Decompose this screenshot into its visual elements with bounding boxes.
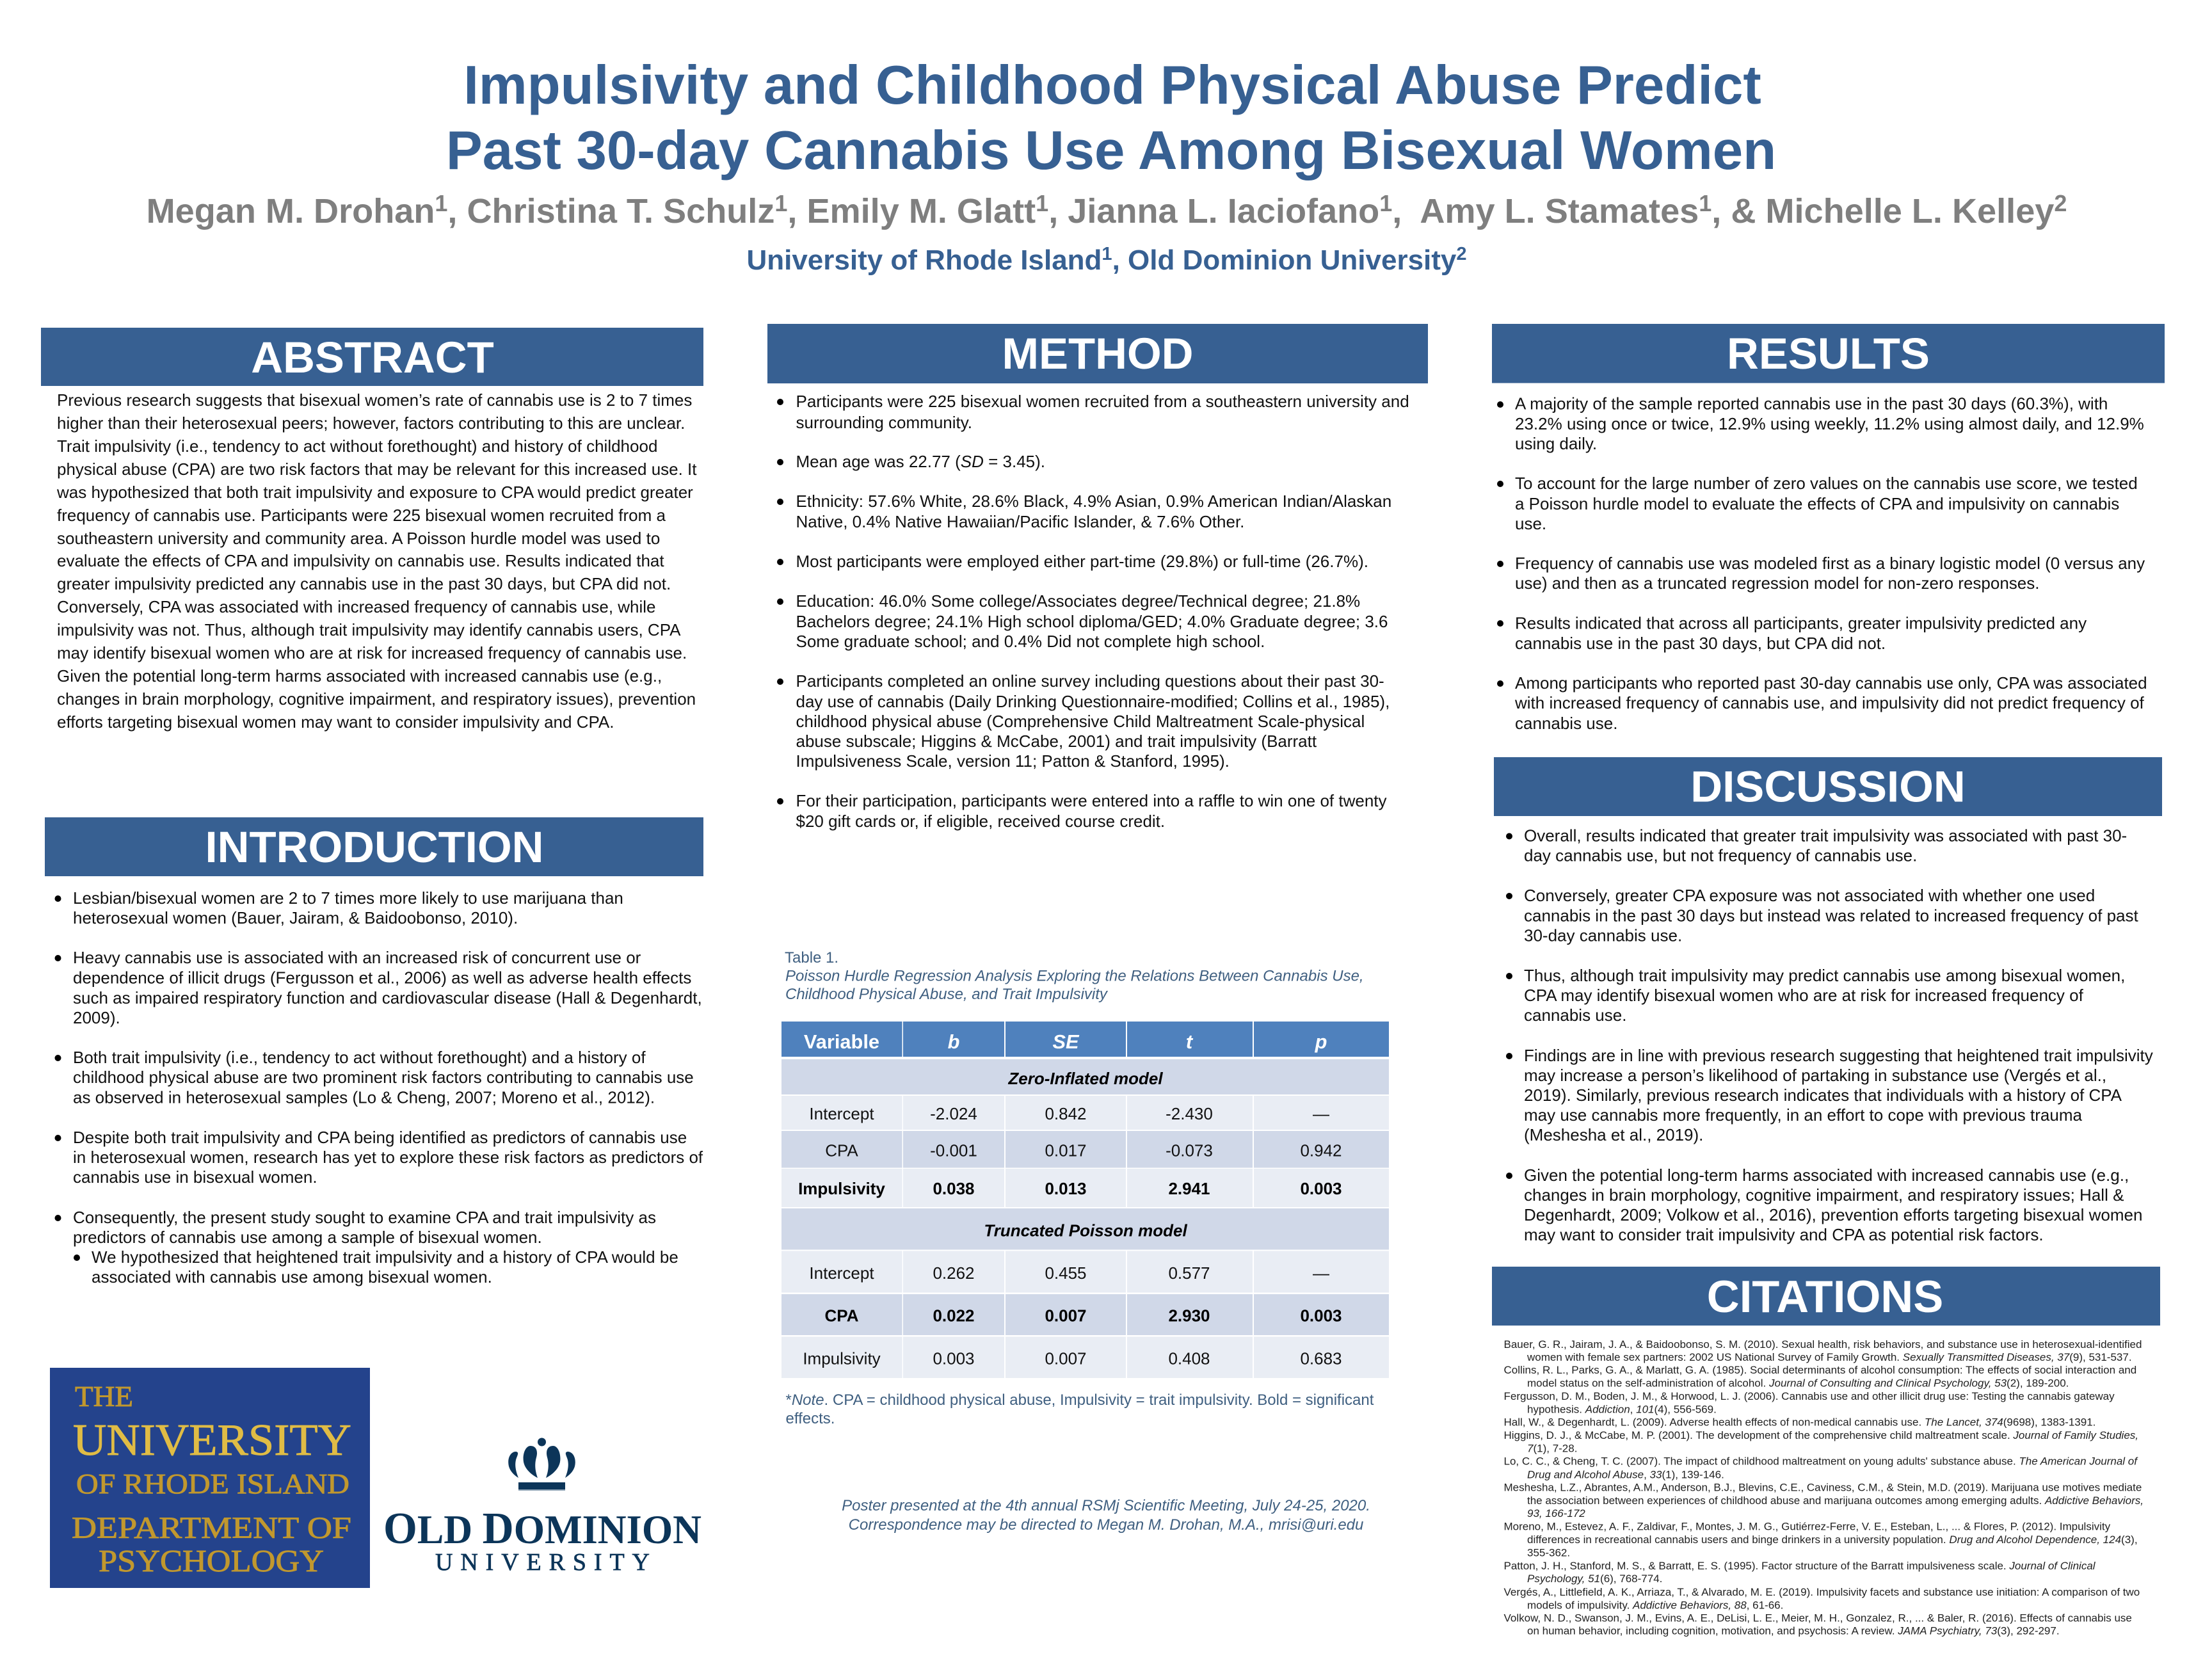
introduction bullets: Both trait impulsivity (i.e., tendency to act without forethought) and a history of — [73, 1048, 646, 1067]
table note — [786, 1391, 1374, 1427]
heading: introduction: INTRODUCTION — [205, 822, 543, 872]
row: CPA 1: -0.073 — [1166, 1141, 1213, 1160]
icon: crown — [508, 1438, 575, 1491]
row: CPA 2: 0.007 — [1045, 1306, 1087, 1325]
logo: University of Rhode Island Department of Psychology: THE — [75, 1381, 133, 1413]
reference list: 93, 166-172 — [1527, 1507, 1585, 1519]
results bullets — [1497, 394, 2147, 733]
discussion bullets: cannabis use. — [1524, 1006, 1626, 1025]
results bullets: To account for the large number of zero values on the cannabis use score, we tested — [1515, 474, 2138, 493]
introduction bullets: Consequently, the present study sought to examine CPA and trait impulsivity as — [73, 1208, 656, 1227]
abstract text: greater impulsivity predicted any cannabis use in the past 30 days, but CPA did not. — [57, 574, 671, 593]
reference list: 355-362. — [1527, 1546, 1570, 1559]
reference list — [1504, 1338, 2144, 1637]
row: CPA 2: 0.003 — [1300, 1306, 1342, 1325]
abstract text: Trait impulsivity (i.e., tendency to act without forethought) and history of childhood — [57, 437, 657, 456]
authors: 1 — [1379, 190, 1392, 216]
introduction bullets: We hypothesized that heightened trait impulsivity and a history of CPA would be — [92, 1247, 678, 1267]
discussion bullets: Findings are in line with previous research suggesting that heightened trait impulsivity — [1524, 1046, 2153, 1065]
results bullets: Frequency of cannabis use was modeled first as a binary logistic model (0 versus any — [1515, 554, 2145, 573]
authors: 1 — [435, 190, 447, 216]
reference list: women with female sex partners: 2002 US National Survey of Family Growth. Sexually Transmitted Diseases, 37(9), 531-537. — [1527, 1351, 2132, 1363]
row: CPA 2 — [781, 1294, 1389, 1335]
discussion bullets: Conversely, greater CPA exposure was not associated with whether one used — [1524, 886, 2095, 905]
reference list: 7(1), 7-28. — [1527, 1443, 1577, 1454]
row: intercept 1 — [781, 1096, 1389, 1130]
authors: Megan M. Drohan — [147, 192, 435, 230]
table note: effects. — [786, 1410, 835, 1427]
logo: University of Rhode Island Department of Psychology: UNIVERSITY — [73, 1416, 351, 1465]
row: impulsivity 2: 0.007 — [1045, 1349, 1087, 1368]
row: impulsivity 1: 2.941 — [1168, 1179, 1210, 1198]
reference list: Drug and Alcohol Abuse, 33(1), 139-146. — [1527, 1468, 1724, 1481]
discussion bullets: day cannabis use, but not frequency of cannabis use. — [1524, 846, 1917, 865]
reference list: Psychology, 51(6), 768-774. — [1527, 1573, 1662, 1585]
row: CPA 1: CPA — [825, 1141, 858, 1160]
authors: 1 — [774, 190, 787, 216]
introduction bullets: as observed in heterosexual samples (Lo & Cheng, 2007; Moreno et al., 2012). — [73, 1088, 655, 1107]
abstract text: changes in brain morphology, cognitive impairment, and respiratory issues), prevention — [57, 689, 696, 709]
abstract text: physical abuse (CPA) are two risk factors that may be relevant for this increased use. It — [57, 460, 697, 479]
table caption: Poisson Hurdle Regression Analysis Exploring the Relations Between Cannabis Use, — [785, 968, 1364, 984]
introduction bullets — [55, 888, 703, 1286]
table header row — [781, 1022, 1389, 1057]
table header row: Variable — [804, 1030, 879, 1053]
row: impulsivity 1: 0.013 — [1045, 1179, 1087, 1198]
row: intercept 1: 0.842 — [1045, 1104, 1087, 1123]
discussion bullets: Overall, results indicated that greater trait impulsivity was associated with past 30- — [1524, 826, 2127, 845]
abstract text: evaluate the effects of CPA and impulsivity on cannabis use. Results indicated that — [57, 551, 664, 570]
authors: 1 — [1036, 190, 1048, 216]
reference list: Moreno, M., Estevez, A. F., Zaldivar, F., Montes, J. M. G., Gutiérrez-Ferre, V. E., Esteban, L., ... & Flores, P. (2012). Impulsivity — [1504, 1521, 2111, 1532]
panel: discussion — [1494, 757, 2162, 1244]
discussion bullets: CPA may identify bisexual women who are at risk for increased frequency of — [1524, 986, 2084, 1005]
method bullets: childhood physical abuse (Comprehensive Child Maltreatment Scale-physical — [796, 712, 1365, 731]
abstract text: Conversely, CPA was associated with increased frequency of cannabis use, while — [57, 597, 656, 616]
row: impulsivity 1: Impulsivity — [798, 1179, 885, 1198]
row: intercept 2 — [781, 1251, 1389, 1293]
table note: *Note. CPA = childhood physical abuse, Impulsivity = trait impulsivity. Bold = significant — [786, 1391, 1374, 1409]
introduction bullets: associated with cannabis use among bisexual women. — [92, 1267, 492, 1286]
reference list: Patton, J. H., Stanford, M. S., & Barratt, E. S. (1995). Factor structure of the Barratt impulsiveness scale. Journal of Clinical — [1504, 1560, 2096, 1572]
method bullets: Participants completed an online survey including questions about their past 30- — [796, 671, 1384, 691]
heading: citations — [1492, 1267, 2160, 1326]
panel: abstract — [41, 328, 703, 732]
reference list: differences in recreational cannabis users and binge drinkers in a university population. Drug and Alcohol Dependence, 124(3), — [1527, 1534, 2138, 1546]
results bullets: cannabis use in the past 30 days, but CPA did not. — [1515, 634, 1886, 653]
results bullets: Among participants who reported past 30-day cannabis use only, CPA was associated — [1515, 673, 2147, 693]
reference list: Volkow, N. D., Swanson, J. M., Evins, A. E., DeLisi, L. E., Meier, M. H., Gonzalez, R., ... & Baler, R. (2016). Effects of cannabis use — [1504, 1612, 2132, 1624]
results bullets: Results indicated that across all participants, greater impulsivity predicted any — [1515, 613, 2087, 632]
abstract text: impulsivity was not. Thus, although trait impulsivity may identify cannabis users, CPA — [57, 620, 681, 639]
row: intercept 2: 0.262 — [933, 1263, 975, 1283]
row: CPA 1: 0.942 — [1300, 1141, 1342, 1160]
row: zero-inflated model: Zero-Inflated model — [1007, 1069, 1163, 1088]
reference list: Hall, W., & Degenhardt, L. (2009). Adverse health effects of non-medical cannabis use. The Lancet, 374(9698), 1383-1391. — [1504, 1416, 2096, 1429]
method bullets: Impulsiveness Scale, version 11; Patton & Stanford, 1995). — [796, 751, 1230, 771]
discussion bullets: (Meshesha et al., 2019). — [1524, 1125, 1703, 1144]
abstract text: may identify bisexual women who are at risk for increased frequency of cannabis use. — [57, 643, 687, 662]
method bullets: For their participation, participants were entered into a raffle to win one of twenty — [796, 791, 1387, 810]
method bullets: day use of cannabis (Daily Drinking Questionnaire-modified; Collins et al., 1985), — [796, 692, 1390, 711]
authors: , & Michelle L. Kelley — [1711, 192, 2054, 230]
reference list: Higgins, D. J., & McCabe, M. P. (2001). The development of the comprehensive child maltreatment scale. Journal of Family Studies, — [1504, 1429, 2138, 1441]
reference list: Lo, C. C., & Cheng, T. C. (2007). The impact of childhood maltreatment on young adults' substance abuse. The American Journal of — [1504, 1455, 2138, 1467]
authors: 1 — [1699, 190, 1711, 216]
discussion bullets: 30-day cannabis use. — [1524, 926, 1682, 945]
logo: Old Dominion University — [383, 1438, 701, 1576]
row: impulsivity 1 — [781, 1169, 1389, 1207]
heading: method — [767, 324, 1428, 383]
results bullets: with increased frequency of cannabis use, and impulsivity did not predict frequency of — [1514, 693, 2145, 712]
introduction bullets: predictors of cannabis use among a sample of bisexual women. — [73, 1228, 542, 1247]
table caption: Childhood Physical Abuse, and Trait Impulsivity — [785, 986, 1109, 1003]
abstract text: was hypothesized that both trait impulsivity and exposure to CPA would predict greater — [56, 483, 693, 502]
method bullets: Most participants were employed either part-time (29.8%) or full-time (26.7%). — [796, 552, 1368, 571]
row: intercept 1: — — [1313, 1104, 1329, 1123]
heading: results: RESULTS — [1727, 329, 1930, 378]
authors: 2 — [2054, 190, 2067, 216]
row: impulsivity 2: 0.408 — [1168, 1349, 1210, 1368]
authors: , Christina T. Schulz — [447, 192, 774, 230]
method bullets: Education: 46.0% Some college/Associates degree/Technical degree; 21.8% — [796, 591, 1360, 611]
discussion bullets: Thus, although trait impulsivity may predict cannabis use among bisexual women, — [1524, 966, 2125, 985]
authors: , Jianna L. Iaciofano — [1048, 192, 1379, 230]
method bullets: surrounding community. — [796, 413, 972, 432]
row: truncated poisson model — [781, 1208, 1389, 1249]
row: CPA 2: 0.022 — [933, 1306, 975, 1325]
introduction bullets: Heavy cannabis use is associated with an increased risk of concurrent use or — [73, 948, 641, 967]
table caption: Table 1. — [785, 949, 838, 966]
discussion bullets: cannabis in the past 30 days but instead was related to increased frequency of past — [1524, 906, 2138, 926]
panel: results — [1492, 324, 2165, 733]
reference list: Vergés, A., Littlefield, A. K., Arriaza, T., & Alvarado, M. E. (2019). Impulsivity facets and substance use initiation: A comparison of two — [1504, 1586, 2140, 1598]
discussion bullets: may increase a person’s likelihood of partaking in substance use (Vergés et al., — [1524, 1066, 2106, 1085]
method bullets: Some graduate school; and 0.4% Did not complete high school. — [796, 632, 1265, 651]
introduction bullets: Lesbian/bisexual women are 2 to 7 times more likely to use marijuana than — [73, 888, 623, 908]
logo: University of Rhode Island Department of Psychology: OF RHODE ISLAND — [76, 1468, 349, 1500]
logo: Old Dominion University: OLD DOMINION — [383, 1504, 701, 1553]
method bullets: Participants were 225 bisexual women recruited from a southeastern university and — [796, 392, 1409, 411]
row: CPA 1: 0.017 — [1045, 1141, 1087, 1160]
heading: results — [1492, 324, 2165, 383]
results bullets: A majority of the sample reported cannabis use in the past 30 days (60.3%), with — [1515, 394, 2108, 413]
row: impulsivity 2: 0.683 — [1300, 1349, 1342, 1368]
introduction bullets: heterosexual women (Bauer, Jairam, & Baidoobonso, 2010). — [73, 908, 518, 927]
table: Poisson hurdle regression — [781, 1022, 1389, 1378]
results bullets: using daily. — [1515, 434, 1597, 453]
reference list: Meshesha, L.Z., Abrantes, A.M., Anderson, B.J., Blevins, C.E., Caviness, C.M., & Stein, M.D. (2019). Marijuana use motives mediate — [1504, 1481, 2142, 1494]
table header row: b — [948, 1030, 959, 1053]
discussion bullets — [1506, 826, 2153, 1244]
row: intercept 1: Intercept — [809, 1104, 874, 1123]
heading: method: METHOD — [1002, 329, 1193, 378]
logo: Old Dominion University: UNIVERSITY — [435, 1549, 650, 1576]
title: Impulsivity and Childhood Physical Abuse Predict — [463, 55, 1761, 116]
method bullets: abuse subscale; Higgins & McCabe, 2001) and trait impulsivity (Barratt — [796, 732, 1317, 751]
abstract text: higher than their heterosexual peers; however, factors contributing to this are unclear. — [57, 413, 685, 433]
row: CPA 2: 2.930 — [1168, 1306, 1210, 1325]
row: CPA 1: -0.001 — [930, 1141, 977, 1160]
conference and correspondence note: Poster presented at the 4th annual RSMj Scientific Meeting, July 24-25, 2020. — [842, 1497, 1370, 1514]
method bullets — [777, 392, 1409, 831]
reference list: hypothesis. Addiction, 101(4), 556-569. — [1527, 1403, 1717, 1416]
discussion bullets: 2019). Similarly, previous research indicates that individuals with a history of CPA — [1524, 1086, 2122, 1105]
heading: introduction — [45, 817, 703, 876]
logo: University of Rhode Island Department of Psychology: DEPARTMENT OF — [72, 1511, 351, 1545]
row: impulsivity 1: 0.003 — [1300, 1179, 1342, 1198]
title — [446, 55, 1776, 181]
row: impulsivity 1: 0.038 — [933, 1179, 975, 1198]
row: intercept 2: Intercept — [809, 1263, 874, 1283]
panel: method — [767, 324, 1428, 831]
results bullets: 23.2% using once or twice, 12.9% using weekly, 11.2% using almost daily, and 12.9% — [1515, 414, 2144, 433]
method bullets: $20 gift cards or, if eligible, received course credit. — [796, 812, 1165, 831]
heading: discussion — [1494, 757, 2162, 816]
discussion bullets: Given the potential long-term harms associated with increased cannabis use (e.g., — [1524, 1166, 2129, 1185]
discussion bullets: may use cannabis more frequently, in an effort to cope with previous trauma — [1524, 1105, 2082, 1125]
heading: discussion: DISCUSSION — [1690, 762, 1966, 812]
table header row: p — [1315, 1030, 1327, 1053]
reference list: Fergusson, D. M., Boden, J. M., & Horwood, L. J. (2006). Cannabis use and other illicit drug use: Testing the cannabis gateway — [1504, 1390, 2115, 1402]
conference and correspondence note — [842, 1497, 1370, 1534]
logo: University of Rhode Island Department of Psychology — [50, 1368, 370, 1588]
introduction bullets: cannabis use in bisexual women. — [73, 1167, 317, 1187]
affiliations: 2 — [1456, 244, 1467, 264]
logo: University of Rhode Island Department of Psychology: PSYCHOLOGY — [99, 1543, 324, 1578]
method bullets: Ethnicity: 57.6% White, 28.6% Black, 4.9% Asian, 0.9% American Indian/Alaskan — [796, 492, 1391, 511]
row: intercept 1: -2.430 — [1166, 1104, 1213, 1123]
discussion bullets: may want to consider trait impulsivity and CPA as potential risk factors. — [1524, 1225, 2044, 1244]
reference list: Collins, R. L., Parks, G. A., & Marlatt, G. A. (1985). Social determinants of alcohol consumption: The effects of social interaction and — [1504, 1364, 2136, 1376]
method bullets: Native, 0.4% Native Hawaiian/Pacific Islander, & 7.6% Other. — [796, 512, 1244, 531]
introduction bullets: dependence of illicit drugs (Fergusson et al., 2006) as well as adverse health effects — [73, 968, 691, 987]
reference list: on human behavior, including cognition, motivation, and psychosis: A review. JAMA Psychiatry, 73(3), 292-297. — [1527, 1624, 2060, 1637]
method bullets: Mean age was 22.77 (SD = 3.45). — [796, 452, 1045, 471]
row: intercept 2: 0.455 — [1045, 1263, 1087, 1283]
conference and correspondence note: Correspondence may be directed to Megan M. Drohan, M.A., mrisi@uri.edu — [849, 1516, 1363, 1534]
table header row: SE — [1052, 1030, 1080, 1053]
table header row: t — [1186, 1030, 1194, 1053]
row: CPA 1 — [781, 1131, 1389, 1167]
introduction bullets: Despite both trait impulsivity and CPA being identified as predictors of cannabis use — [73, 1128, 687, 1147]
row: intercept 1: -2.024 — [930, 1104, 977, 1123]
results bullets: a Poisson hurdle model to evaluate the effects of CPA and impulsivity on cannabis — [1515, 494, 2119, 513]
abstract text: frequency of cannabis use. Participants were 225 bisexual women recruited from a — [57, 506, 666, 525]
introduction bullets: childhood physical abuse are two prominent risk factors contributing to cannabis use — [73, 1068, 694, 1087]
row: impulsivity 2: Impulsivity — [803, 1349, 881, 1368]
affiliations: University of Rhode Island — [746, 244, 1102, 276]
results bullets: use. — [1515, 514, 1546, 533]
introduction bullets: such as impaired respiratory function and cardiovascular disease (Hall & Degenhardt, — [73, 988, 702, 1007]
table caption — [785, 949, 1364, 1003]
affiliations: 1 — [1102, 244, 1112, 264]
authors: , Emily M. Glatt — [787, 192, 1036, 230]
reference list: Bauer, G. R., Jairam, J. A., & Baidoobonso, S. M. (2010). Sexual health, risk behaviors, and substance use in heterosexual-identified — [1504, 1338, 2142, 1350]
introduction bullets: 2009). — [73, 1008, 120, 1027]
title: Past 30-day Cannabis Use Among Bisexual Women — [446, 120, 1776, 181]
row: intercept 2: 0.577 — [1168, 1263, 1210, 1283]
abstract text: efforts targeting bisexual women may want to consider impulsivity and CPA. — [57, 712, 614, 732]
reference list: the association between experiences of childhood abuse and marijuana outcomes among emerging adults. Addictive Behaviors, — [1527, 1495, 2144, 1507]
heading: abstract: ABSTRACT — [251, 333, 494, 382]
introduction bullets: in heterosexual women, research has yet to explore these risk factors as predictors of — [73, 1148, 703, 1167]
discussion bullets: Degenhardt, 2009; Volkow et al., 2016), prevention efforts targeting bisexual women — [1524, 1205, 2142, 1224]
row: intercept 2: — — [1313, 1263, 1329, 1283]
row: CPA 2: CPA — [825, 1306, 859, 1325]
abstract text: southeastern university and community area. A Poisson hurdle model was used to — [57, 529, 660, 548]
heading: citations: CITATIONS — [1707, 1271, 1943, 1322]
method bullets: Bachelors degree; 24.1% High school diploma/GED; 4.0% Graduate degree; 3.6 — [796, 612, 1388, 631]
row: impulsivity 2 — [781, 1336, 1389, 1378]
authors: , Amy L. Stamates — [1392, 192, 1699, 230]
results bullets: cannabis use. — [1515, 714, 1617, 733]
panel: citations — [1492, 1267, 2160, 1637]
heading: abstract — [41, 328, 703, 386]
abstract text: Given the potential long-term harms associated with increased cannabis use (e.g., — [57, 666, 662, 685]
row: truncated poisson model: Truncated Poisson model — [984, 1221, 1187, 1240]
panel: introduction — [45, 817, 703, 1286]
results bullets: use) and then as a truncated regression model for non-zero responses. — [1515, 573, 2039, 593]
row: impulsivity 2: 0.003 — [933, 1349, 975, 1368]
row: zero-inflated model — [781, 1059, 1389, 1094]
reference list: model status on the self-administration of alcohol. Journal of Consulting and Clinical Psychology, 53(2), 189-200. — [1527, 1377, 2069, 1389]
abstract text — [56, 390, 697, 732]
abstract text: Previous research suggests that bisexual women’s rate of cannabis use is 2 to 7 times — [57, 390, 692, 410]
discussion bullets: changes in brain morphology, cognitive impairment, and respiratory issues; Hall & — [1524, 1185, 2124, 1205]
reference list: models of impulsivity. Addictive Behaviors, 88, 61-66. — [1527, 1599, 1783, 1612]
affiliations: , Old Dominion University — [1112, 244, 1457, 276]
